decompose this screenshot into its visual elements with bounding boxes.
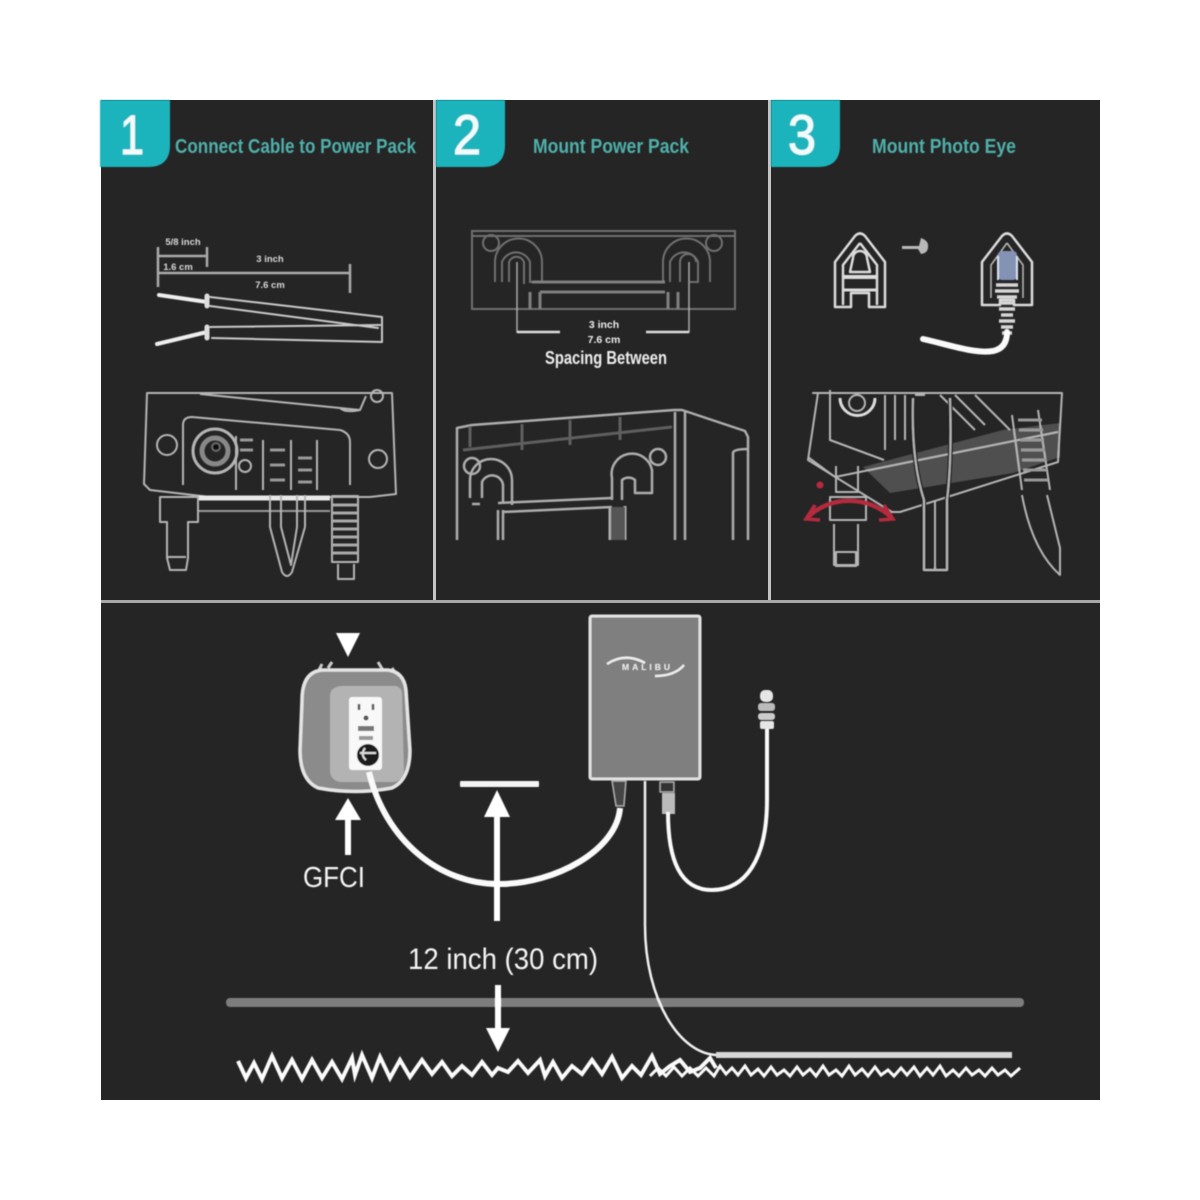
mounted power pack illustration [457, 410, 748, 540]
cable strip dimensions: 5/8 inch [165, 237, 201, 248]
panel: step 2 mount power pack [436, 100, 748, 540]
step 3 heading: Mount Photo Eye [872, 136, 1016, 158]
power cable to outlet [369, 772, 620, 884]
right connector [660, 782, 675, 814]
panel: step 3 mount photo eye [771, 100, 1062, 575]
panel: bottom installation overview [226, 616, 1024, 1079]
mounting bracket icon [835, 234, 885, 307]
split cable illustration [157, 295, 382, 344]
cable strip dimensions: 3 inch [256, 254, 284, 265]
spacing label: Spacing Between [545, 348, 667, 368]
down arrow above GFCI [336, 633, 360, 657]
photo eye cable [923, 332, 1007, 352]
step 1 heading: Connect Cable to Power Pack [175, 136, 417, 158]
spacing label [545, 319, 667, 368]
power pack unit: MALIBU [622, 662, 670, 672]
step 1 badge: 1 [120, 103, 144, 166]
power pack terminals illustration [144, 390, 396, 579]
GFCI outlet cover [300, 662, 410, 792]
screw icon [902, 238, 928, 254]
height arrow upper [484, 790, 510, 921]
photo eye lead cable [668, 728, 767, 890]
step 2 badge: 2 [453, 103, 481, 166]
GFCI label: GFCI [303, 862, 365, 894]
left connector [612, 781, 626, 806]
step 3 badge [771, 100, 840, 167]
spacing label: 7.6 cm [588, 334, 620, 346]
height label: 12 inch (30 cm) [408, 943, 598, 976]
cable strip dimensions [158, 237, 350, 293]
height reference bar [460, 781, 539, 787]
step 2 badge [436, 100, 505, 167]
step 3 badge: 3 [788, 103, 816, 166]
spacing label: 3 inch [589, 319, 619, 331]
photo eye in bracket icon [982, 234, 1032, 333]
step 2 heading: Mount Power Pack [533, 136, 690, 158]
up arrow to GFCI [335, 798, 361, 855]
power pack with cables illustration [808, 390, 1062, 575]
ground rail [226, 998, 1024, 1007]
spacing dimension lines [517, 262, 689, 332]
height arrow lower [486, 985, 510, 1052]
panel: step 1 connect cable to power pack [100, 100, 417, 579]
ground surface [238, 1055, 1020, 1079]
cable strip dimensions: 1.6 cm [163, 262, 193, 273]
power pack unit [590, 616, 700, 779]
photo eye plug [758, 690, 775, 729]
cable strip dimensions: 7.6 cm [255, 280, 285, 291]
step 1 badge [100, 100, 170, 167]
mounting plate illustration [472, 231, 735, 309]
rotation arrow [806, 482, 893, 520]
low voltage cable to ground [645, 781, 718, 1055]
